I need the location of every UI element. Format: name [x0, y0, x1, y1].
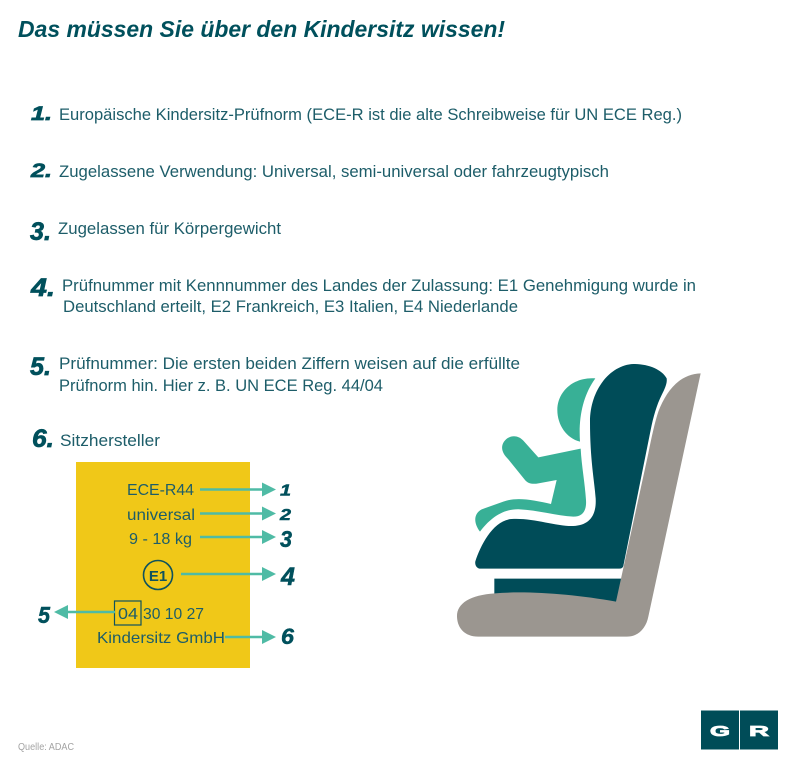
list item 3: 3.	[30, 218, 51, 246]
label text: ECE-R44: ECE-R44	[127, 482, 194, 499]
list item 6: Sitzhersteller	[60, 432, 161, 450]
callout number 1: 1	[280, 482, 291, 500]
label text: universal: universal	[127, 507, 195, 524]
vehicle seat	[457, 373, 701, 637]
label text: manufacturer: Kindersitz GmbH	[97, 630, 225, 647]
list item 4: Deutschland erteilt, E2 Frankreich, E3 Italien, E4 Niederlande	[63, 298, 518, 316]
panel: approval label	[76, 462, 250, 668]
arrow to 5	[68, 611, 115, 613]
arrow to 2	[200, 512, 262, 515]
child head	[557, 378, 595, 442]
list item 5	[30, 353, 520, 395]
label text: approval number	[114, 601, 204, 625]
list item 4: Prüfnummer mit Kennnummer des Landes der Zulassung: E1 Genehmigung wurde in	[62, 277, 696, 295]
logo	[701, 710, 778, 750]
list item 3: Zugelassen für Körpergewicht	[58, 220, 281, 238]
icon: E1 approval mark: E1	[149, 568, 167, 585]
list item 4: 4.	[30, 274, 55, 302]
arrow to 3	[200, 536, 262, 538]
source: Quelle: ADAC	[18, 741, 74, 753]
list item 5: Prüfnummer: Die ersten beiden Ziffern weisen auf die erfüllte	[59, 355, 520, 373]
logo: G	[710, 723, 730, 740]
list item 6: 6.	[32, 425, 54, 453]
arrow to 6	[225, 636, 262, 638]
logo: R	[749, 723, 769, 740]
child body	[475, 436, 586, 532]
illustration: child seat	[457, 364, 701, 637]
list item 5: 5.	[30, 353, 51, 381]
list item 3	[30, 218, 281, 246]
list item 6	[32, 425, 161, 453]
seat base	[494, 579, 622, 603]
title: Das müssen Sie über den Kindersitz wissen!	[18, 16, 505, 42]
callout number 2: 2	[279, 507, 291, 524]
list item 5: Prüfnorm hin. Hier z. B. UN ECE Reg. 44/04	[59, 377, 383, 395]
callout number 3: 3	[280, 526, 292, 552]
label text: approval number: 04	[118, 606, 138, 623]
callout number 6: 6	[281, 624, 295, 649]
list item 1: Europäische Kindersitz-Prüfnorm (ECE-R ist die alte Schreibweise für UN ECE Reg.)	[59, 106, 682, 124]
list item 1: 1.	[31, 104, 52, 125]
callout number 5: 5	[38, 602, 51, 628]
label text: weight range: 9 - 18 kg	[129, 531, 192, 548]
seat shell	[475, 364, 667, 569]
callout number 4: 4	[280, 563, 295, 591]
arrow to 4	[181, 573, 262, 575]
list item 2: Zugelassene Verwendung: Universal, semi-universal oder fahrzeugtypisch	[59, 163, 609, 181]
label text: approval number: 30 10 27	[143, 606, 204, 623]
icon: E1 approval mark	[144, 560, 172, 590]
arrow to 1	[200, 488, 262, 491]
list item 4	[30, 274, 696, 316]
list item 2: 2.	[30, 161, 52, 182]
